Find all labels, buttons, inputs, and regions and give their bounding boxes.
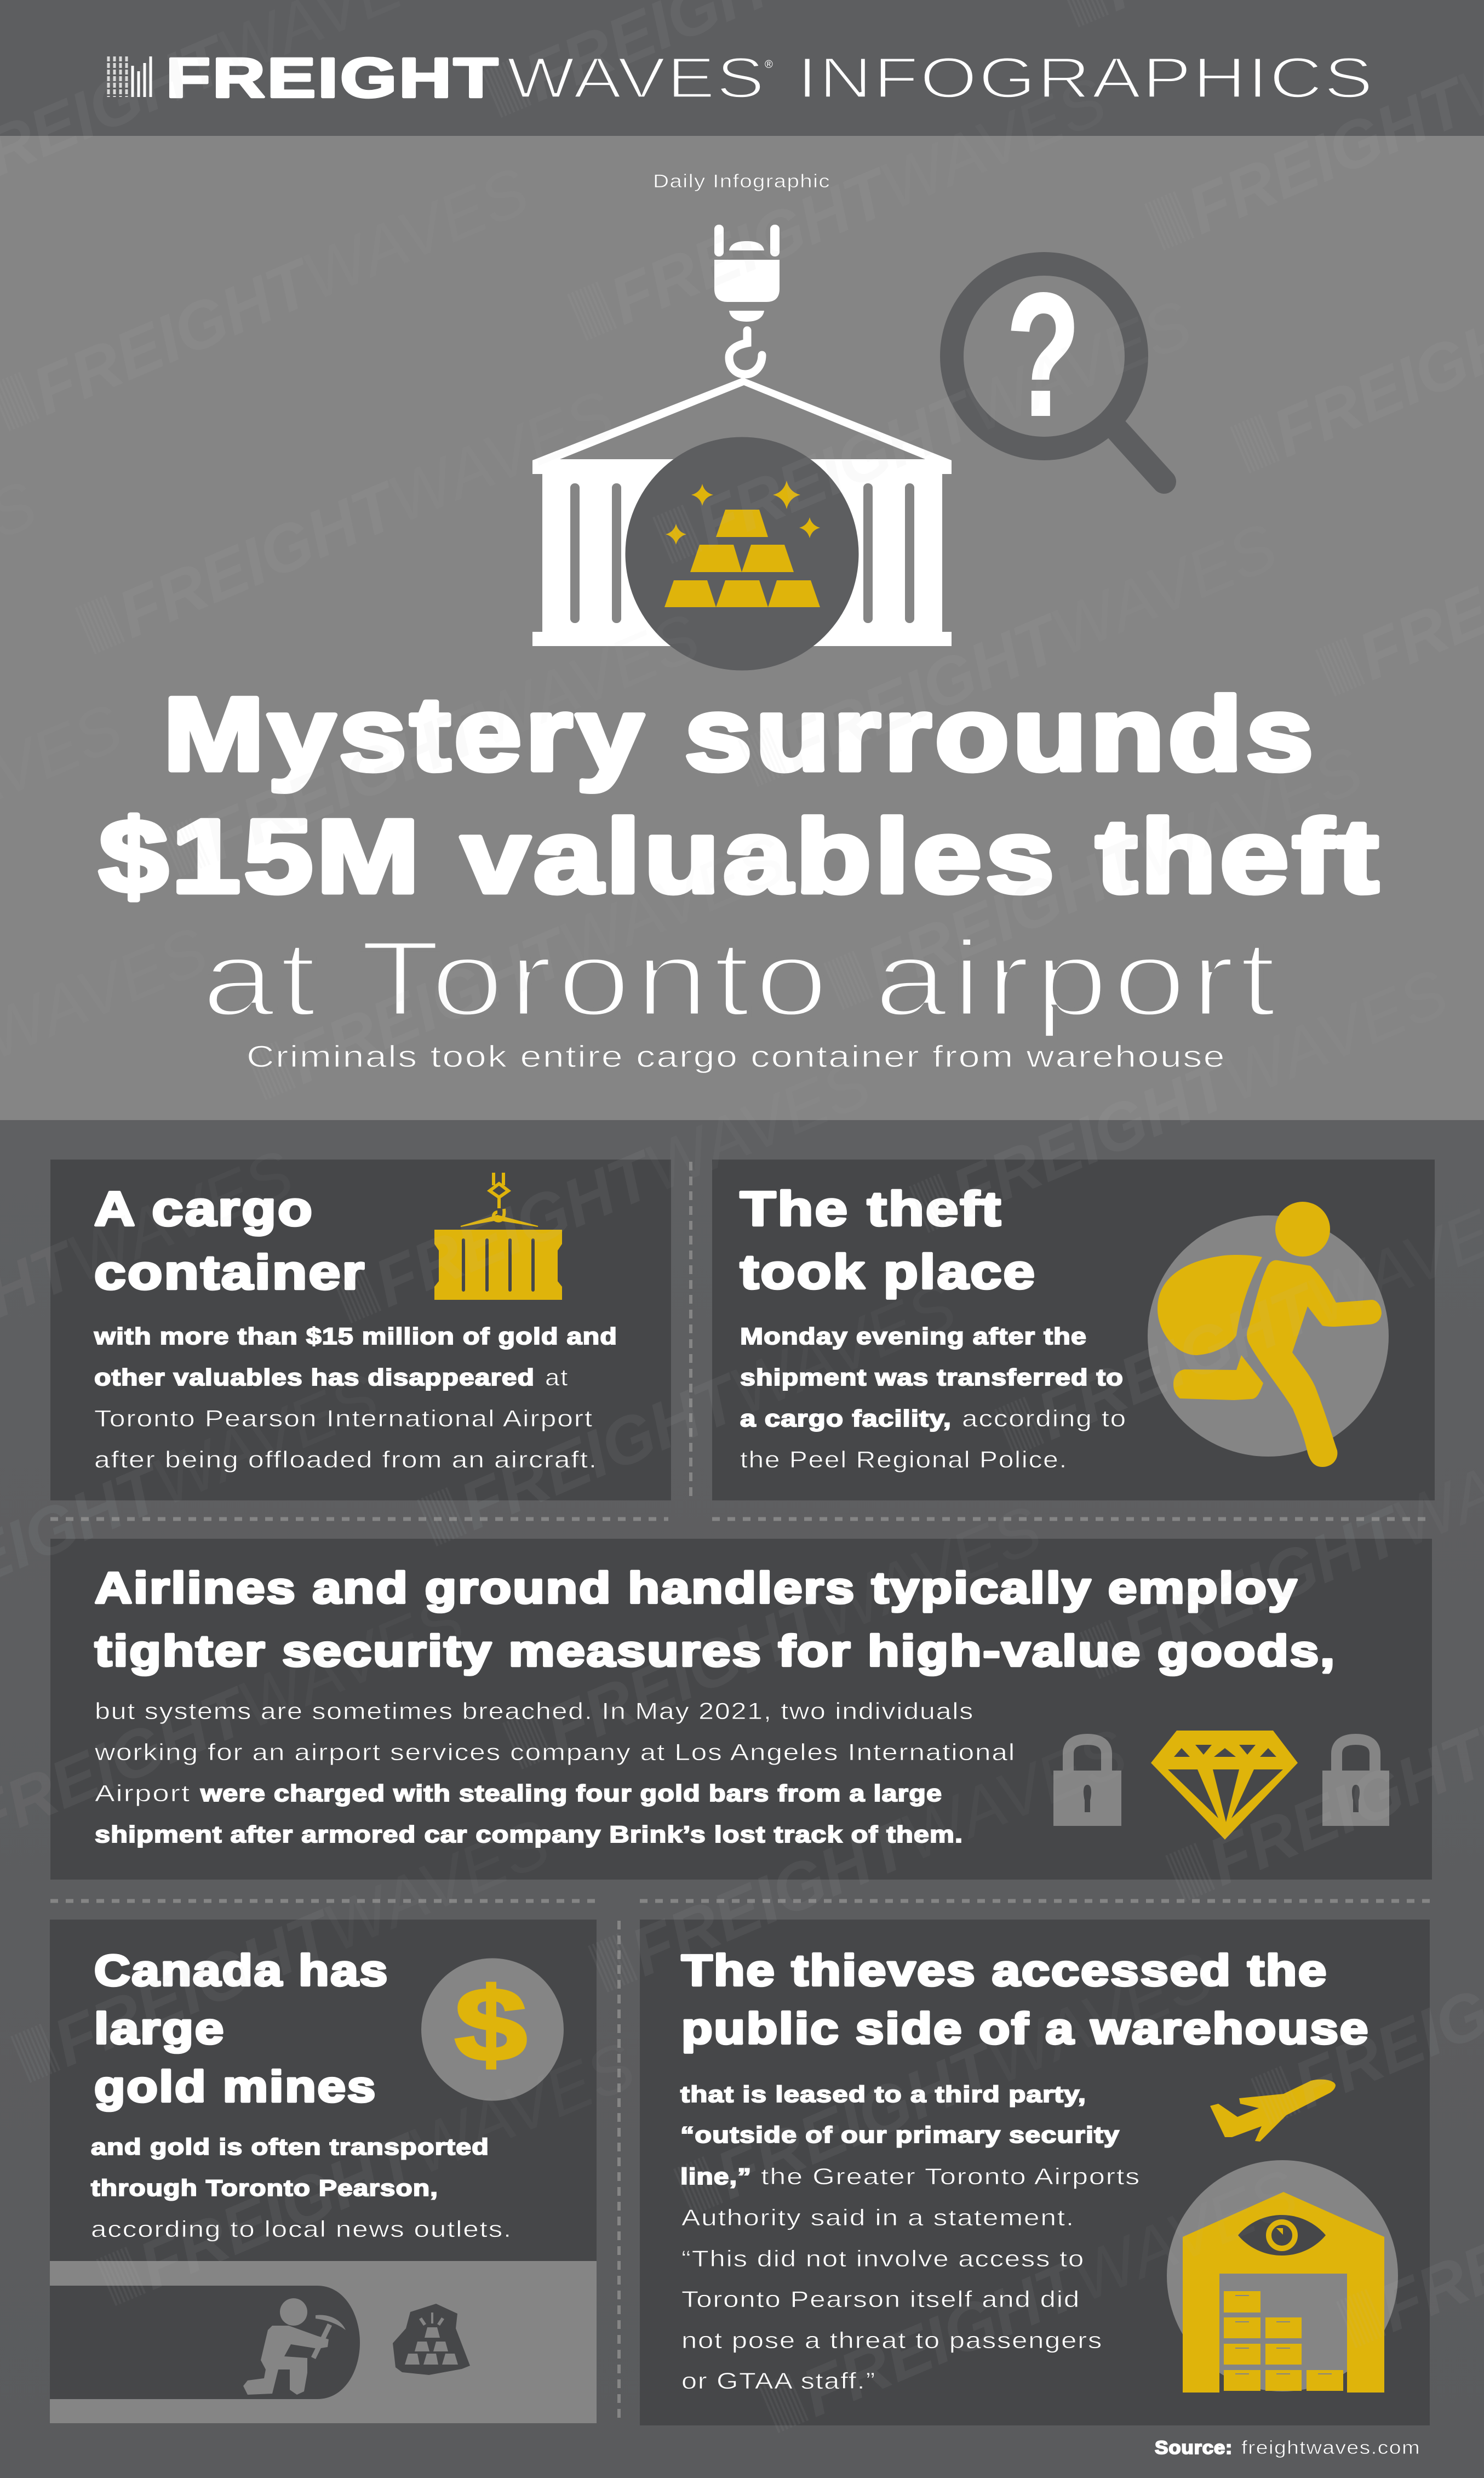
logo: registered mark: ®: [765, 59, 773, 71]
icon: dark circle behind gold: [626, 437, 859, 671]
watermark pattern: FREIGHTWAVES: [364, 1046, 881, 1321]
watermark pattern: FREIGHTWAVES: [128, 2028, 645, 2304]
heading line 2: large: [94, 2004, 225, 2053]
body text: Airport: [95, 1780, 191, 1807]
icon: warehouse with eye: [1167, 2160, 1398, 2393]
kicker: Daily Infographic: Daily Infographic: [653, 171, 830, 192]
heading line 2: tighter security measures for high-value goods,: [95, 1626, 1336, 1675]
body text: that is leased to a third party,: [680, 2081, 1086, 2107]
source line: [1155, 2437, 1420, 2458]
body text: or GTAA staff.”: [681, 2368, 876, 2394]
body text: the Greater Toronto Airports: [761, 2163, 1141, 2189]
mine tunnel: [50, 2286, 360, 2399]
body text: with more than $15 million of gold and: [94, 1323, 617, 1350]
lower section background: [0, 1120, 1484, 2478]
body text: but systems are sometimes breached. In May 2021, two individuals: [95, 1698, 974, 1725]
heading: Canada has: [94, 1946, 389, 1995]
watermark pattern: FREIGHTWAVES: [278, 823, 795, 1098]
body text: according to: [962, 1406, 1127, 1432]
heading line 2: took place: [740, 1244, 1036, 1299]
body text: were charged with stealing four gold bars from a large: [200, 1780, 942, 1807]
body text: [91, 2134, 512, 2242]
body text: and gold is often transported: [91, 2134, 489, 2160]
watermark pattern: FREIGHTWAVES: [22, 153, 539, 429]
watermark pattern: FREIGHTWAVES: [856, 732, 1373, 1008]
body text: [94, 1323, 617, 1473]
panel: the thieves accessed: [640, 1920, 1430, 2425]
body text: Toronto Pearson itself and did: [681, 2286, 1080, 2312]
icon: gold bars: [664, 510, 820, 607]
body text: “This did not involve access to: [681, 2246, 1085, 2271]
watermark pattern: FREIGHTWAVES: [599, 63, 1116, 339]
body text: [94, 1698, 1016, 1848]
icon: container with sling: [532, 378, 952, 646]
heading line 2: container: [94, 1245, 366, 1299]
icon: right padlock: [1322, 1739, 1389, 1826]
body text: [680, 2081, 1141, 2394]
logo: FREIGHT: FREIGHT: [166, 47, 500, 109]
watermark pattern: FREIGHTWAVES: [193, 599, 710, 875]
icon: crane hook: [714, 225, 780, 374]
hero background: [0, 136, 1484, 1120]
icon: running thief: [1148, 1202, 1389, 1467]
icon: gold diamond: [1151, 1731, 1298, 1840]
heading: A cargo: [94, 1181, 314, 1236]
title line 1: Mystery surrounds: [163, 676, 1317, 792]
header band: [0, 0, 1484, 136]
body text: according to local news outlets.: [91, 2216, 512, 2242]
hero illustration: crane and container with gold: [532, 225, 952, 671]
title line 2: $15M valuables theft: [99, 798, 1382, 915]
icon: gold in rock: [393, 2304, 470, 2375]
body text: Toronto Pearson International Airport: [94, 1406, 593, 1432]
body text: [740, 1323, 1127, 1473]
heading: The theft: [740, 1181, 1002, 1236]
panel: the theft took place: [712, 1160, 1435, 1500]
body text: shipment was transferred to: [740, 1364, 1124, 1391]
icon: logo bars: [108, 56, 151, 97]
watermark pattern: FREIGHTWAVES: [706, 1938, 1223, 2213]
icon: miner: [243, 2298, 346, 2395]
title line 3: at Toronto airport: [202, 918, 1281, 1038]
heading line 2: public side of a warehouse: [681, 2004, 1370, 2053]
body text: Monday evening after the: [740, 1323, 1087, 1350]
body text: after being offloaded from an aircraft.: [94, 1447, 598, 1473]
watermark pattern: FREIGHTWAVES: [107, 376, 624, 652]
icon: magnifying glass with question mark: ?: [1006, 258, 1080, 452]
icon: sparkles: [666, 481, 820, 545]
icon: dollar coin: $: [455, 1967, 527, 2083]
source line: Source:: [1155, 2437, 1233, 2458]
watermark pattern: FREIGHTWAVES: [449, 1269, 966, 1544]
title: [99, 676, 1382, 1074]
watermark pattern: FREIGHTWAVES: [620, 1715, 1137, 1990]
panel: canada has large gold mines: [50, 1920, 597, 2423]
watermark pattern: FREIGHTWAVES: [941, 955, 1458, 1231]
icon: gold container: [434, 1173, 562, 1300]
icon: magnifying glass with question mark: [952, 258, 1164, 482]
icon: airplane: [1210, 2080, 1336, 2142]
heading: Airlines and ground handlers typically employ: [95, 1563, 1298, 1612]
watermark pattern: FREIGHTWAVES: [770, 509, 1287, 785]
watermark pattern: [50, 481, 1432, 2425]
dashed dividers: [50, 1162, 1431, 2422]
body text: other valuables has disappeared: [94, 1364, 535, 1391]
heading line 3: gold mines: [94, 2062, 377, 2111]
subtitle: Criminals took entire cargo container from warehouse: [247, 1039, 1226, 1074]
watermark pattern: FREIGHTWAVES: [791, 2155, 1308, 2431]
icon: left padlock: [1053, 1739, 1121, 1826]
header logo and title: [108, 46, 1374, 110]
heading: The thieves accessed the: [681, 1946, 1328, 1995]
body text: Authority said in a statement.: [681, 2205, 1075, 2230]
body text: not pose a threat to passengers: [681, 2327, 1103, 2353]
body text: line,”: [680, 2163, 752, 2189]
body text: a cargo facility,: [740, 1406, 952, 1432]
panel: a cargo container: [50, 1160, 671, 1500]
body text: working for an airport services company at Los Angeles International: [94, 1739, 1016, 1766]
watermark pattern: FREIGHTWAVES: [43, 1805, 560, 2081]
body text: the Peel Regional Police.: [740, 1447, 1068, 1473]
source line: freightwaves.com: [1241, 2437, 1420, 2458]
logo: WAVES: WAVES: [507, 46, 766, 110]
heading: INFOGRAPHICS: INFOGRAPHICS: [797, 46, 1374, 110]
watermark pattern: FREIGHTWAVES: [535, 1492, 1052, 1767]
body text: “outside of our primary security: [680, 2122, 1120, 2148]
body text: at: [545, 1364, 569, 1391]
mine scene: [50, 2261, 597, 2423]
warehouse boxes: [1224, 2291, 1343, 2391]
body text: through Toronto Pearson,: [91, 2175, 438, 2201]
icon: dollar coin: [421, 1959, 564, 2101]
body text: shipment after armored car company Brink’s lost track of them.: [95, 1822, 963, 1848]
watermark pattern: FREIGHTWAVES: [685, 286, 1202, 562]
panel: airlines and ground handlers: [50, 1539, 1432, 1880]
